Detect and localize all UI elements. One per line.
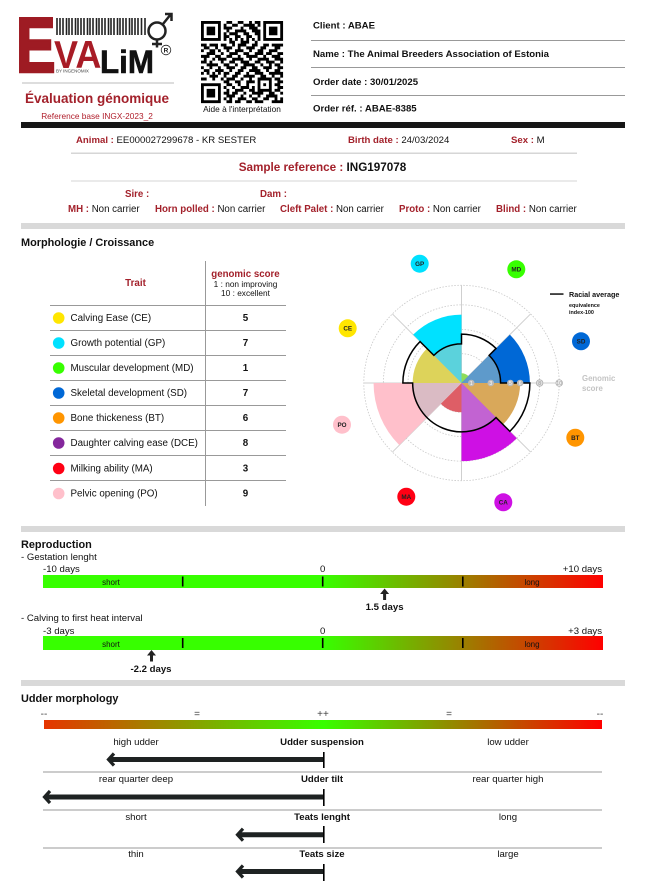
row: MD: Muscular development (MD) xyxy=(70,363,194,374)
score scale: 10 xyxy=(556,381,562,387)
table header: 1 : non improving xyxy=(214,279,278,289)
marker: -2.2 days xyxy=(130,650,172,675)
table header: genomic score xyxy=(211,269,280,280)
row: teats size xyxy=(128,849,519,881)
header bar xyxy=(21,122,625,128)
label: PO: PO xyxy=(337,422,347,429)
row: PO xyxy=(53,488,249,500)
gauge: calving to first heat interval: short xyxy=(102,640,121,649)
QR code xyxy=(201,22,283,102)
row: CE: 5 xyxy=(243,313,249,324)
row: teats length: long xyxy=(499,812,517,823)
logo: Evalim: VA xyxy=(54,33,101,76)
row: DCE xyxy=(53,437,249,449)
gauge: calving to first heat interval: long xyxy=(524,640,540,649)
heading: Udder morphology: Udder morphology xyxy=(21,693,118,705)
arrow xyxy=(108,752,324,768)
order details: Name : The Animal Breeders Association of Estonia xyxy=(313,49,550,60)
genetic conditions: Proto : Non carrier xyxy=(399,204,482,215)
row: teats size: Teats size xyxy=(299,849,345,860)
row: PO: 9 xyxy=(243,488,249,500)
row: MA: 3 xyxy=(243,464,249,474)
parents xyxy=(125,189,287,200)
label: GP xyxy=(411,255,429,273)
label: MD: MD xyxy=(511,266,522,274)
row: CE: Calving Ease (CE) xyxy=(70,313,151,324)
logo: Evalim xyxy=(16,1,172,89)
label: CA xyxy=(494,493,512,511)
label: BT xyxy=(566,429,584,447)
sector: MA xyxy=(441,383,462,412)
row: teats size: large xyxy=(497,849,519,860)
row: SD: 7 xyxy=(243,388,249,399)
animal identity xyxy=(76,135,545,146)
radar chart xyxy=(364,285,562,481)
label: GP: GP xyxy=(415,261,424,268)
udder scale: -- xyxy=(41,709,47,720)
animal identity: Animal : EE000027299678 - KR SESTER xyxy=(76,135,256,146)
section band xyxy=(21,223,625,229)
score scale: 8 xyxy=(538,381,541,387)
row: SD: Skeletal development (SD) xyxy=(70,388,187,399)
row: CE xyxy=(53,312,249,324)
sector: CA xyxy=(462,383,517,461)
genetic conditions: Horn polled : Non carrier xyxy=(155,204,266,215)
udder scale: ++ xyxy=(317,709,329,720)
row: PO: Pelvic opening (PO) xyxy=(70,488,158,500)
parents: Sire : xyxy=(125,189,149,200)
logo rule xyxy=(22,82,174,84)
gauge: calving to first heat interval xyxy=(21,613,603,675)
legend: racial average xyxy=(550,290,619,316)
table header: Trait xyxy=(125,278,147,289)
sector: CE xyxy=(413,348,462,383)
order details: Order réf. : ABAE-8385 xyxy=(313,104,417,114)
trait table xyxy=(50,261,286,506)
row: udder suspension: high udder xyxy=(113,737,159,748)
row: MA xyxy=(53,463,249,474)
sector: BT xyxy=(462,383,520,424)
sector: SD xyxy=(462,335,530,383)
label: BT: BT xyxy=(571,435,580,442)
gauge: gestation length: -10 days xyxy=(43,564,80,575)
sector: GP xyxy=(413,315,462,383)
marker: 1.5 days: 1.5 days xyxy=(366,602,404,613)
row: GP: 7 xyxy=(243,338,249,349)
racial average outline xyxy=(403,334,530,432)
genetic conditions: Cleft Palet : Non carrier xyxy=(280,204,385,215)
genetic conditions: Blind : Non carrier xyxy=(496,204,578,215)
row: BT: 6 xyxy=(243,413,249,424)
marker: -2.2 days: -2.2 days xyxy=(130,664,172,675)
gauge: gestation length xyxy=(21,552,603,613)
arrow xyxy=(238,826,324,843)
gauge: gestation length: - Gestation lenght xyxy=(21,552,97,563)
score scale: 5 xyxy=(509,381,512,387)
score scale xyxy=(468,380,562,387)
udder scale: = xyxy=(194,709,200,720)
label: MD xyxy=(507,260,525,278)
icon: barcode xyxy=(57,18,145,35)
udder scale: = xyxy=(446,709,452,720)
row: MD xyxy=(53,362,249,374)
label: SD: SD xyxy=(577,338,586,346)
label: SD xyxy=(572,332,590,350)
logo: Evalim: E xyxy=(16,1,56,89)
row: MA: Milking ability (MA) xyxy=(70,464,153,474)
axis label: genomic score: Genomic xyxy=(582,374,616,383)
genetic conditions xyxy=(68,204,578,215)
row: teats length xyxy=(125,812,517,843)
logo: Evalim: LiM xyxy=(100,44,154,80)
icon: gender symbol xyxy=(148,14,172,48)
axis label: genomic score: score xyxy=(582,384,603,393)
row: teats length: Teats lenght xyxy=(294,812,351,823)
heading: Évaluation génomique: Évaluation génomique xyxy=(25,91,169,106)
row: udder tilt xyxy=(44,774,543,806)
animal identity: Sex : M xyxy=(511,135,545,146)
label: CA: CA xyxy=(499,500,508,506)
gauge: gestation length: 0 xyxy=(320,564,325,575)
row: GP: Growth potential (GP) xyxy=(70,338,165,349)
row: DCE: 8 xyxy=(243,438,249,449)
animal identity: Birth date : 24/03/2024 xyxy=(348,135,450,146)
heading: Morphologie / Croissance: Morphologie / Croissance xyxy=(21,237,154,249)
order details xyxy=(311,20,625,114)
logo: Evalim: R xyxy=(164,48,169,54)
arrow xyxy=(44,789,324,806)
gauge: calving to first heat interval: - Calving to first heat interval xyxy=(21,613,143,624)
legend: racial average: index-100 xyxy=(569,310,594,316)
label: CE: CE xyxy=(343,326,352,332)
row: teats length: short xyxy=(125,812,147,823)
row: MD: 1 xyxy=(243,363,249,374)
score scale: 3 xyxy=(489,381,492,387)
row: udder tilt: rear quarter high xyxy=(473,774,543,785)
row: teats size: thin xyxy=(128,849,144,860)
score scale: 6 xyxy=(519,381,522,387)
order details: Client : ABAE xyxy=(313,20,376,32)
label: MA: MA xyxy=(401,494,412,501)
axis label: genomic score xyxy=(582,374,616,393)
gauge: calving to first heat interval: -3 days xyxy=(43,626,75,637)
logo: Evalim: BY INGENOMIX xyxy=(56,68,89,74)
reference base: Reference base INGX-2023_2 xyxy=(41,111,153,121)
gauge: gestation length: short xyxy=(102,578,121,587)
parents: Dam : xyxy=(260,189,287,200)
row: BT: Bone thickeness (BT) xyxy=(70,413,164,424)
genetic conditions: MH : Non carrier xyxy=(68,204,140,215)
sector: PO xyxy=(374,383,462,445)
sample reference: Sample reference : ING197078 xyxy=(239,161,407,174)
udder scale: -- xyxy=(597,709,603,720)
row: DCE: Daughter calving ease (DCE) xyxy=(70,438,198,449)
row: udder tilt: rear quarter deep xyxy=(99,774,173,785)
label: CE xyxy=(339,319,357,337)
gauge: calving to first heat interval: +3 days xyxy=(568,626,602,637)
label: MA xyxy=(397,488,415,506)
legend: racial average: equivalence xyxy=(569,303,600,309)
row: SD xyxy=(53,387,249,399)
udder scale xyxy=(41,709,603,729)
row: BT xyxy=(53,412,249,424)
QR caption: Aide à l'interprétation xyxy=(203,104,281,114)
row: udder suspension xyxy=(108,737,530,768)
section band xyxy=(21,526,625,532)
table header: 10 : excellent xyxy=(221,288,271,298)
gauge: gestation length: long xyxy=(524,578,540,587)
row: udder tilt: Udder tilt xyxy=(301,774,344,785)
section band xyxy=(21,680,625,686)
gauge: gestation length: +10 days xyxy=(563,564,602,575)
sector: MD xyxy=(462,373,468,383)
gauge: calving to first heat interval: 0 xyxy=(320,626,325,637)
row: GP xyxy=(53,337,249,349)
row: udder suspension: low udder xyxy=(487,737,530,748)
score scale: 1 xyxy=(470,381,473,387)
table header xyxy=(125,269,280,298)
heading: Reproduction: Reproduction xyxy=(21,539,92,551)
label: PO xyxy=(333,416,351,434)
order details: Order date : 30/01/2025 xyxy=(313,77,419,88)
arrow xyxy=(238,864,324,881)
row: udder suspension: Udder suspension xyxy=(280,737,364,748)
marker: 1.5 days xyxy=(366,588,404,613)
legend: racial average: Racial average xyxy=(569,290,619,299)
